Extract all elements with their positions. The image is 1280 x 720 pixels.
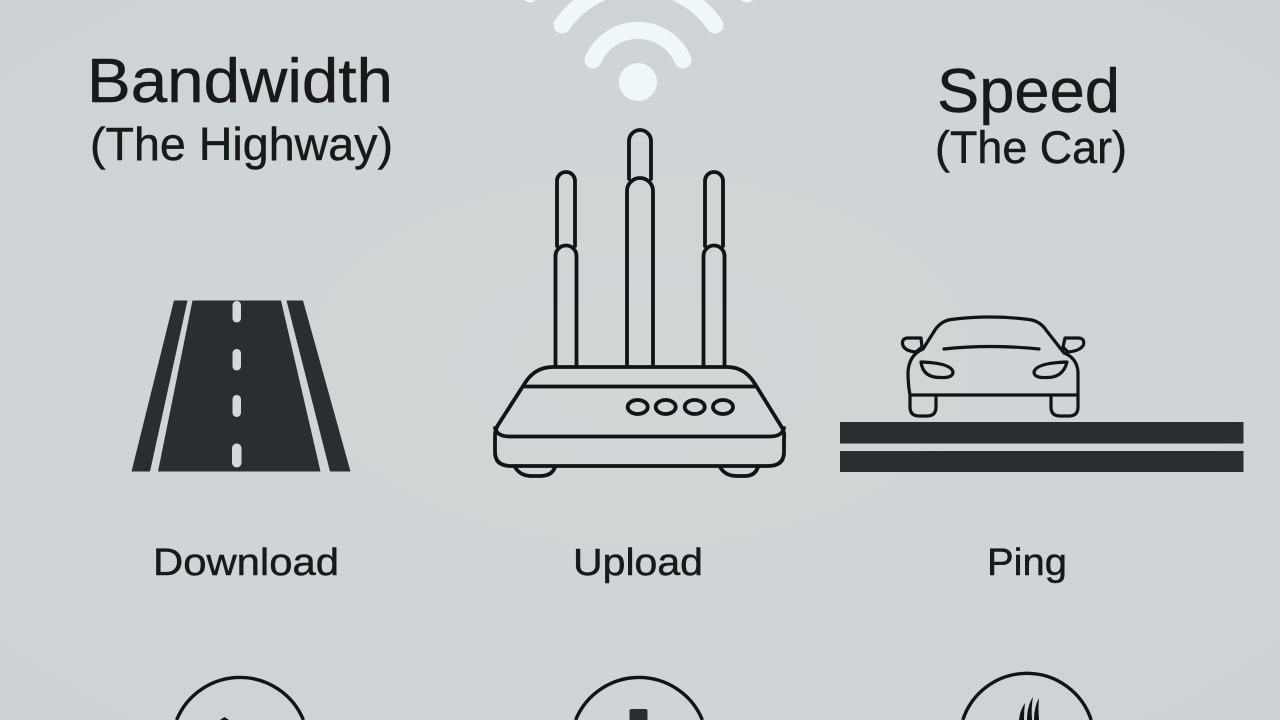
heading: Speed (The Car): Speed: [937, 57, 1120, 126]
router antennas: [556, 130, 724, 367]
router body: [495, 367, 784, 476]
road lane dashes: [232, 301, 242, 468]
icon: download gauge: [177, 677, 303, 720]
icon: car: [902, 317, 1084, 416]
label: Ping: Ping: [987, 542, 1067, 584]
label: Download: Download: [153, 542, 339, 584]
icon: router: [495, 130, 784, 476]
icon: highway road: [132, 300, 350, 472]
heading: Speed (The Car): [935, 57, 1127, 173]
icon: wifi signal: [530, 0, 747, 101]
label: Upload: Upload: [573, 542, 703, 584]
car mirrors: [902, 338, 922, 352]
car wheels: [910, 395, 936, 416]
car headlights: [921, 362, 953, 378]
ping speed marks: [1019, 697, 1039, 720]
heading: Bandwidth (The Highway): [87, 47, 393, 170]
icon: ping gauge: [963, 673, 1091, 720]
road under the car: [840, 422, 1244, 472]
router status lights: [628, 400, 733, 414]
icon: upload gauge: [576, 677, 702, 720]
heading: Speed (The Car): (The Car): [935, 122, 1127, 173]
heading: Bandwidth (The Highway): Bandwidth: [87, 47, 393, 116]
heading: Bandwidth (The Highway): (The Highway): [90, 118, 393, 170]
